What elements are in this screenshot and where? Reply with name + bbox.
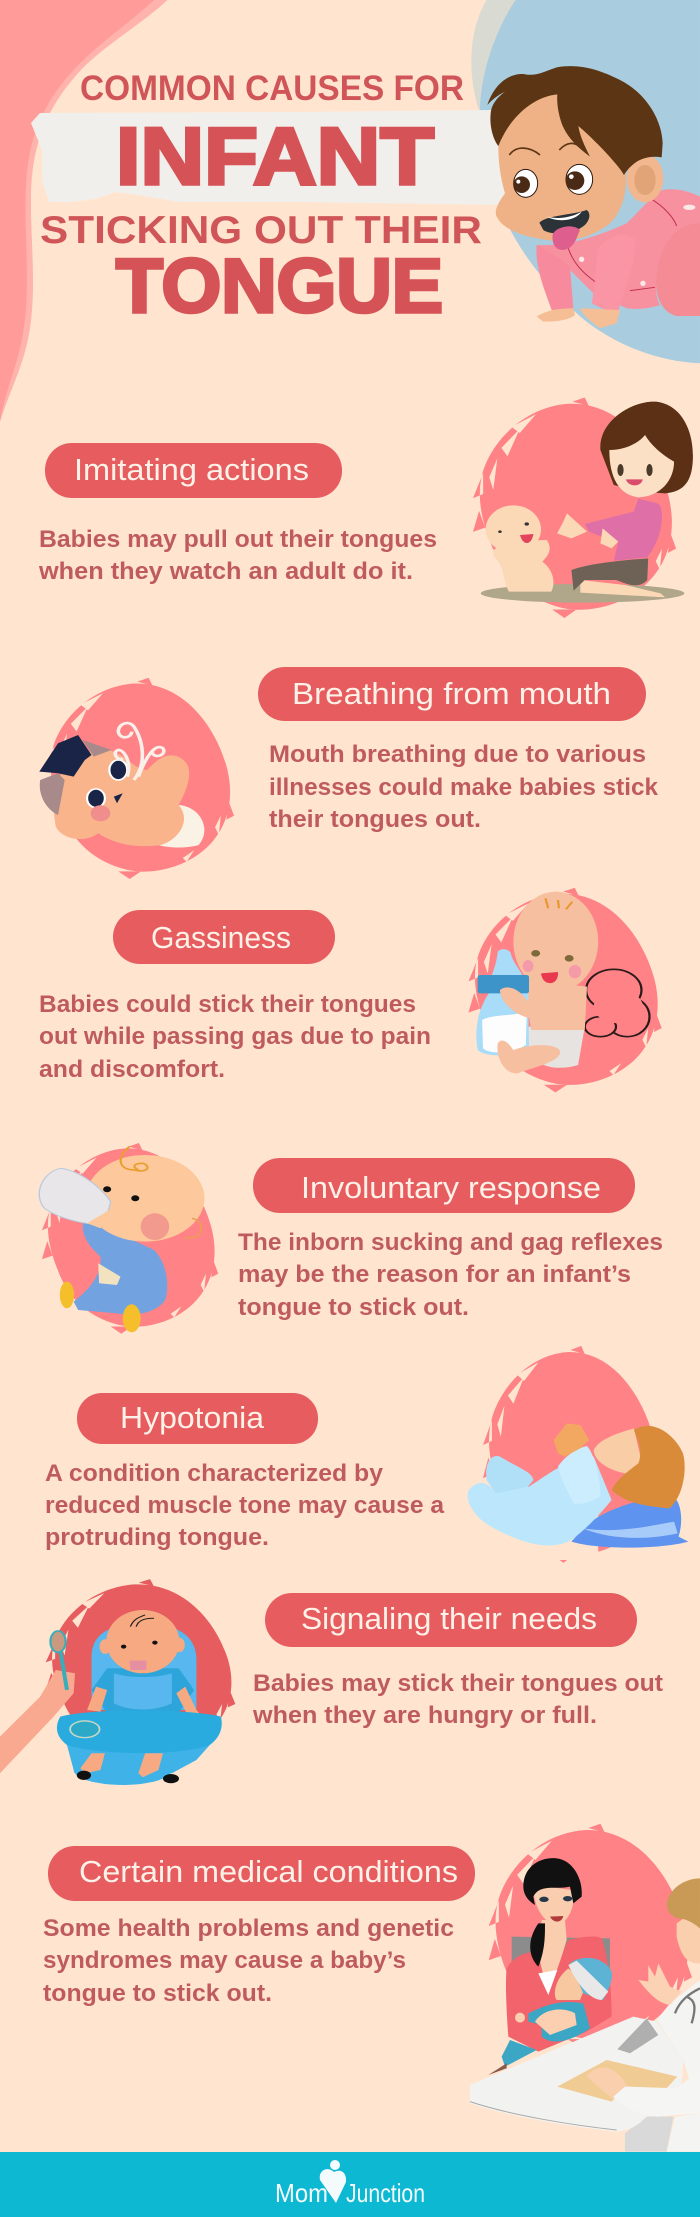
section: breathing from mouth xyxy=(39,667,658,879)
footer logo: MomJunction: Junction xyxy=(346,2178,425,2208)
pill heading xyxy=(258,667,646,721)
body text: Mouth breathing due to various xyxy=(269,741,646,768)
body text: reduced muscle tone may cause a xyxy=(45,1492,444,1519)
icon: baby breathing through mouth xyxy=(39,678,234,879)
body text xyxy=(238,1229,663,1321)
pill heading xyxy=(253,1158,635,1213)
title: INFANT xyxy=(116,112,434,202)
section: gassiness xyxy=(39,888,662,1092)
title: STICKING OUT THEIR xyxy=(40,209,482,252)
body text: syndromes may cause a baby’s xyxy=(43,1947,406,1974)
header blue backdrop xyxy=(471,0,700,363)
pill heading: Hypotonia xyxy=(120,1400,265,1435)
header pink wave xyxy=(0,0,167,422)
body text: out while passing gas due to pain xyxy=(39,1023,431,1050)
icon: crawling baby sticking out tongue xyxy=(487,66,700,328)
body text xyxy=(269,741,658,833)
body text xyxy=(38,526,437,585)
pill heading xyxy=(48,1846,475,1901)
icon: baby lying on pillow xyxy=(464,1346,688,1563)
section: involuntary response xyxy=(39,1143,663,1334)
footer logo: MomJunction: Mom xyxy=(275,2178,328,2208)
section: imitating actions xyxy=(38,397,693,618)
body text: Babies could stick their tongues xyxy=(39,991,416,1018)
body text: when they are hungry or full. xyxy=(252,1702,597,1729)
body text: Some health problems and genetic xyxy=(43,1915,454,1942)
footer logo: MomJunction xyxy=(275,2160,425,2208)
title: TONGUE xyxy=(116,244,443,329)
body text: tongue to stick out. xyxy=(238,1294,469,1321)
title: COMMON CAUSES FOR xyxy=(80,69,464,108)
pill heading: Signaling their needs xyxy=(301,1601,597,1636)
section: certain medical conditions xyxy=(43,1824,700,2152)
body text: A condition characterized by xyxy=(45,1460,383,1487)
icon: baby in high chair with spoon xyxy=(0,1579,235,1785)
body text xyxy=(252,1670,663,1729)
pill heading: Involuntary response xyxy=(301,1170,601,1205)
pill heading xyxy=(265,1593,637,1647)
body text: and discomfort. xyxy=(39,1056,225,1083)
section: signaling their needs xyxy=(0,1579,663,1785)
pill heading xyxy=(45,443,342,498)
pill heading xyxy=(77,1393,318,1444)
body text xyxy=(39,991,431,1083)
pill heading: Imitating actions xyxy=(74,452,309,487)
pill heading: Certain medical conditions xyxy=(79,1854,458,1889)
pill heading xyxy=(113,910,335,964)
icon: baby drinking from bottle xyxy=(39,1143,218,1334)
body text: when they watch an adult do it. xyxy=(38,558,413,585)
title xyxy=(40,69,482,329)
body text: protruding tongue. xyxy=(45,1524,269,1551)
body text: The inborn sucking and gag reflexes xyxy=(238,1229,663,1256)
icon: mother with baby at doctor's desk xyxy=(470,1824,700,2152)
torn paper strip xyxy=(31,110,506,205)
body text xyxy=(43,1915,454,2007)
body text: Babies may stick their tongues out xyxy=(253,1670,663,1697)
body text: their tongues out. xyxy=(269,806,481,833)
body text xyxy=(45,1460,444,1551)
pill heading: Breathing from mouth xyxy=(292,676,611,711)
icon: mother and baby xyxy=(473,397,693,618)
body text: may be the reason for an infant’s xyxy=(238,1261,631,1288)
icon: baby with bottle and gas cloud xyxy=(468,888,662,1092)
section: hypotonia xyxy=(45,1346,688,1563)
body text: illnesses could make babies stick xyxy=(269,774,658,801)
pill heading: Gassiness xyxy=(151,920,291,955)
body text: tongue to stick out. xyxy=(43,1980,272,2007)
body text: Babies may pull out their tongues xyxy=(39,526,437,553)
footer bar xyxy=(0,2152,700,2217)
